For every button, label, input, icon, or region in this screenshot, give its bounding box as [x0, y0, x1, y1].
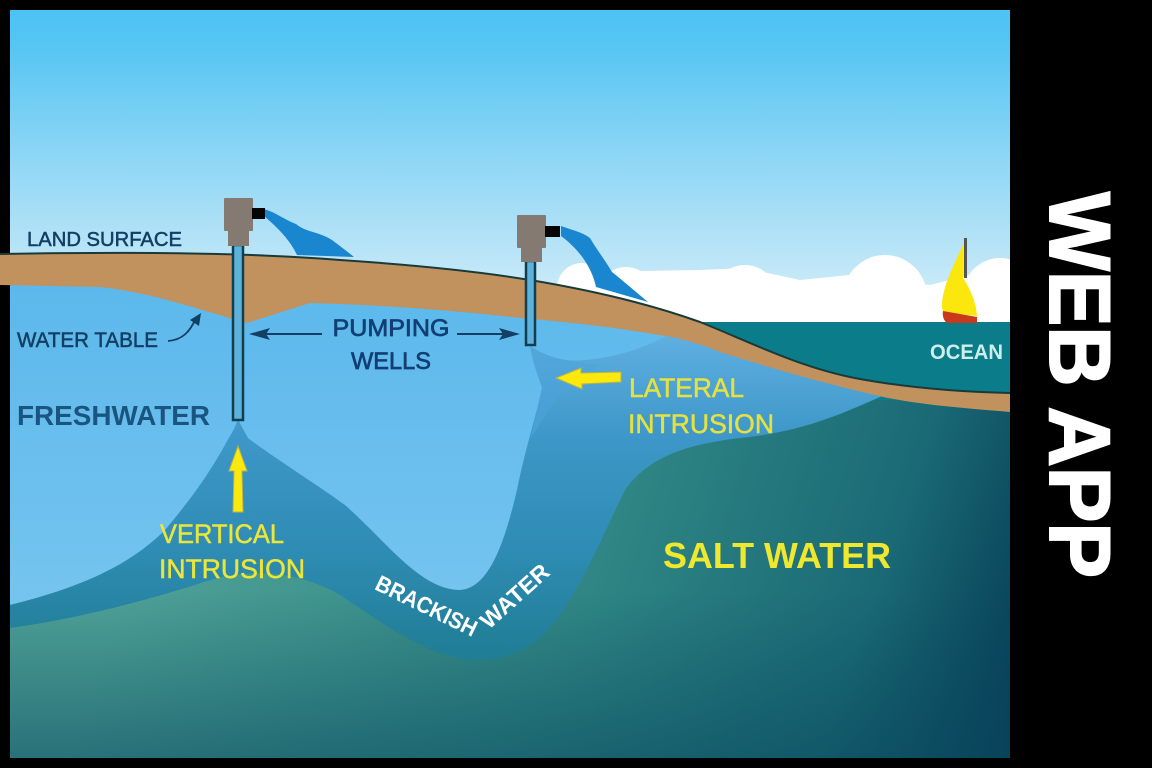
label: ocean: OCEAN [930, 341, 1003, 364]
label: lateral intrusion [628, 373, 774, 439]
label: land surface: LAND SURFACE [27, 229, 182, 251]
label: pumping wells: WELLS [351, 348, 431, 375]
arrow: water table [168, 313, 201, 341]
clouds [557, 255, 1037, 339]
label: vertical intrusion: VERTICAL [160, 519, 284, 549]
salt water depth shading [10, 590, 1010, 758]
label: pumping wells: PUMPING [332, 315, 450, 342]
label: brackish water: BRACKISH [371, 570, 482, 642]
label: water table: WATER TABLE [17, 329, 158, 352]
arrow: vertical intrusion [229, 446, 247, 512]
arrow: pumping wells right [457, 328, 520, 340]
label: pumping wells [332, 315, 450, 375]
land surface line [0, 253, 1010, 393]
water spout right [561, 226, 648, 302]
label: lateral intrusion: LATERAL [629, 373, 744, 403]
arrow: lateral intrusion [556, 368, 621, 389]
sky [10, 10, 1010, 330]
ocean [690, 322, 1010, 400]
panel: land band [0, 253, 1010, 412]
label: brackish water [371, 558, 555, 642]
lateral cone tint [530, 346, 600, 440]
arrow: pumping wells left [249, 328, 322, 340]
label: salt water: SALT WATER [663, 535, 891, 576]
label: brackish water: WATER [475, 558, 555, 634]
label: vertical intrusion: INTRUSION [159, 554, 305, 584]
panel: freshwater region [10, 270, 665, 605]
title: web app: WEB APP [1031, 192, 1127, 578]
label: vertical intrusion [159, 519, 305, 584]
label: lateral intrusion: INTRUSION [628, 409, 774, 439]
black side panel [1010, 0, 1152, 768]
icon: left well [224, 198, 265, 420]
water spout left [264, 209, 354, 257]
panel: brackish water region [10, 285, 882, 660]
label: freshwater: FRESHWATER [17, 400, 210, 431]
icon: sailboat [942, 238, 977, 323]
icon: right well [517, 215, 560, 345]
